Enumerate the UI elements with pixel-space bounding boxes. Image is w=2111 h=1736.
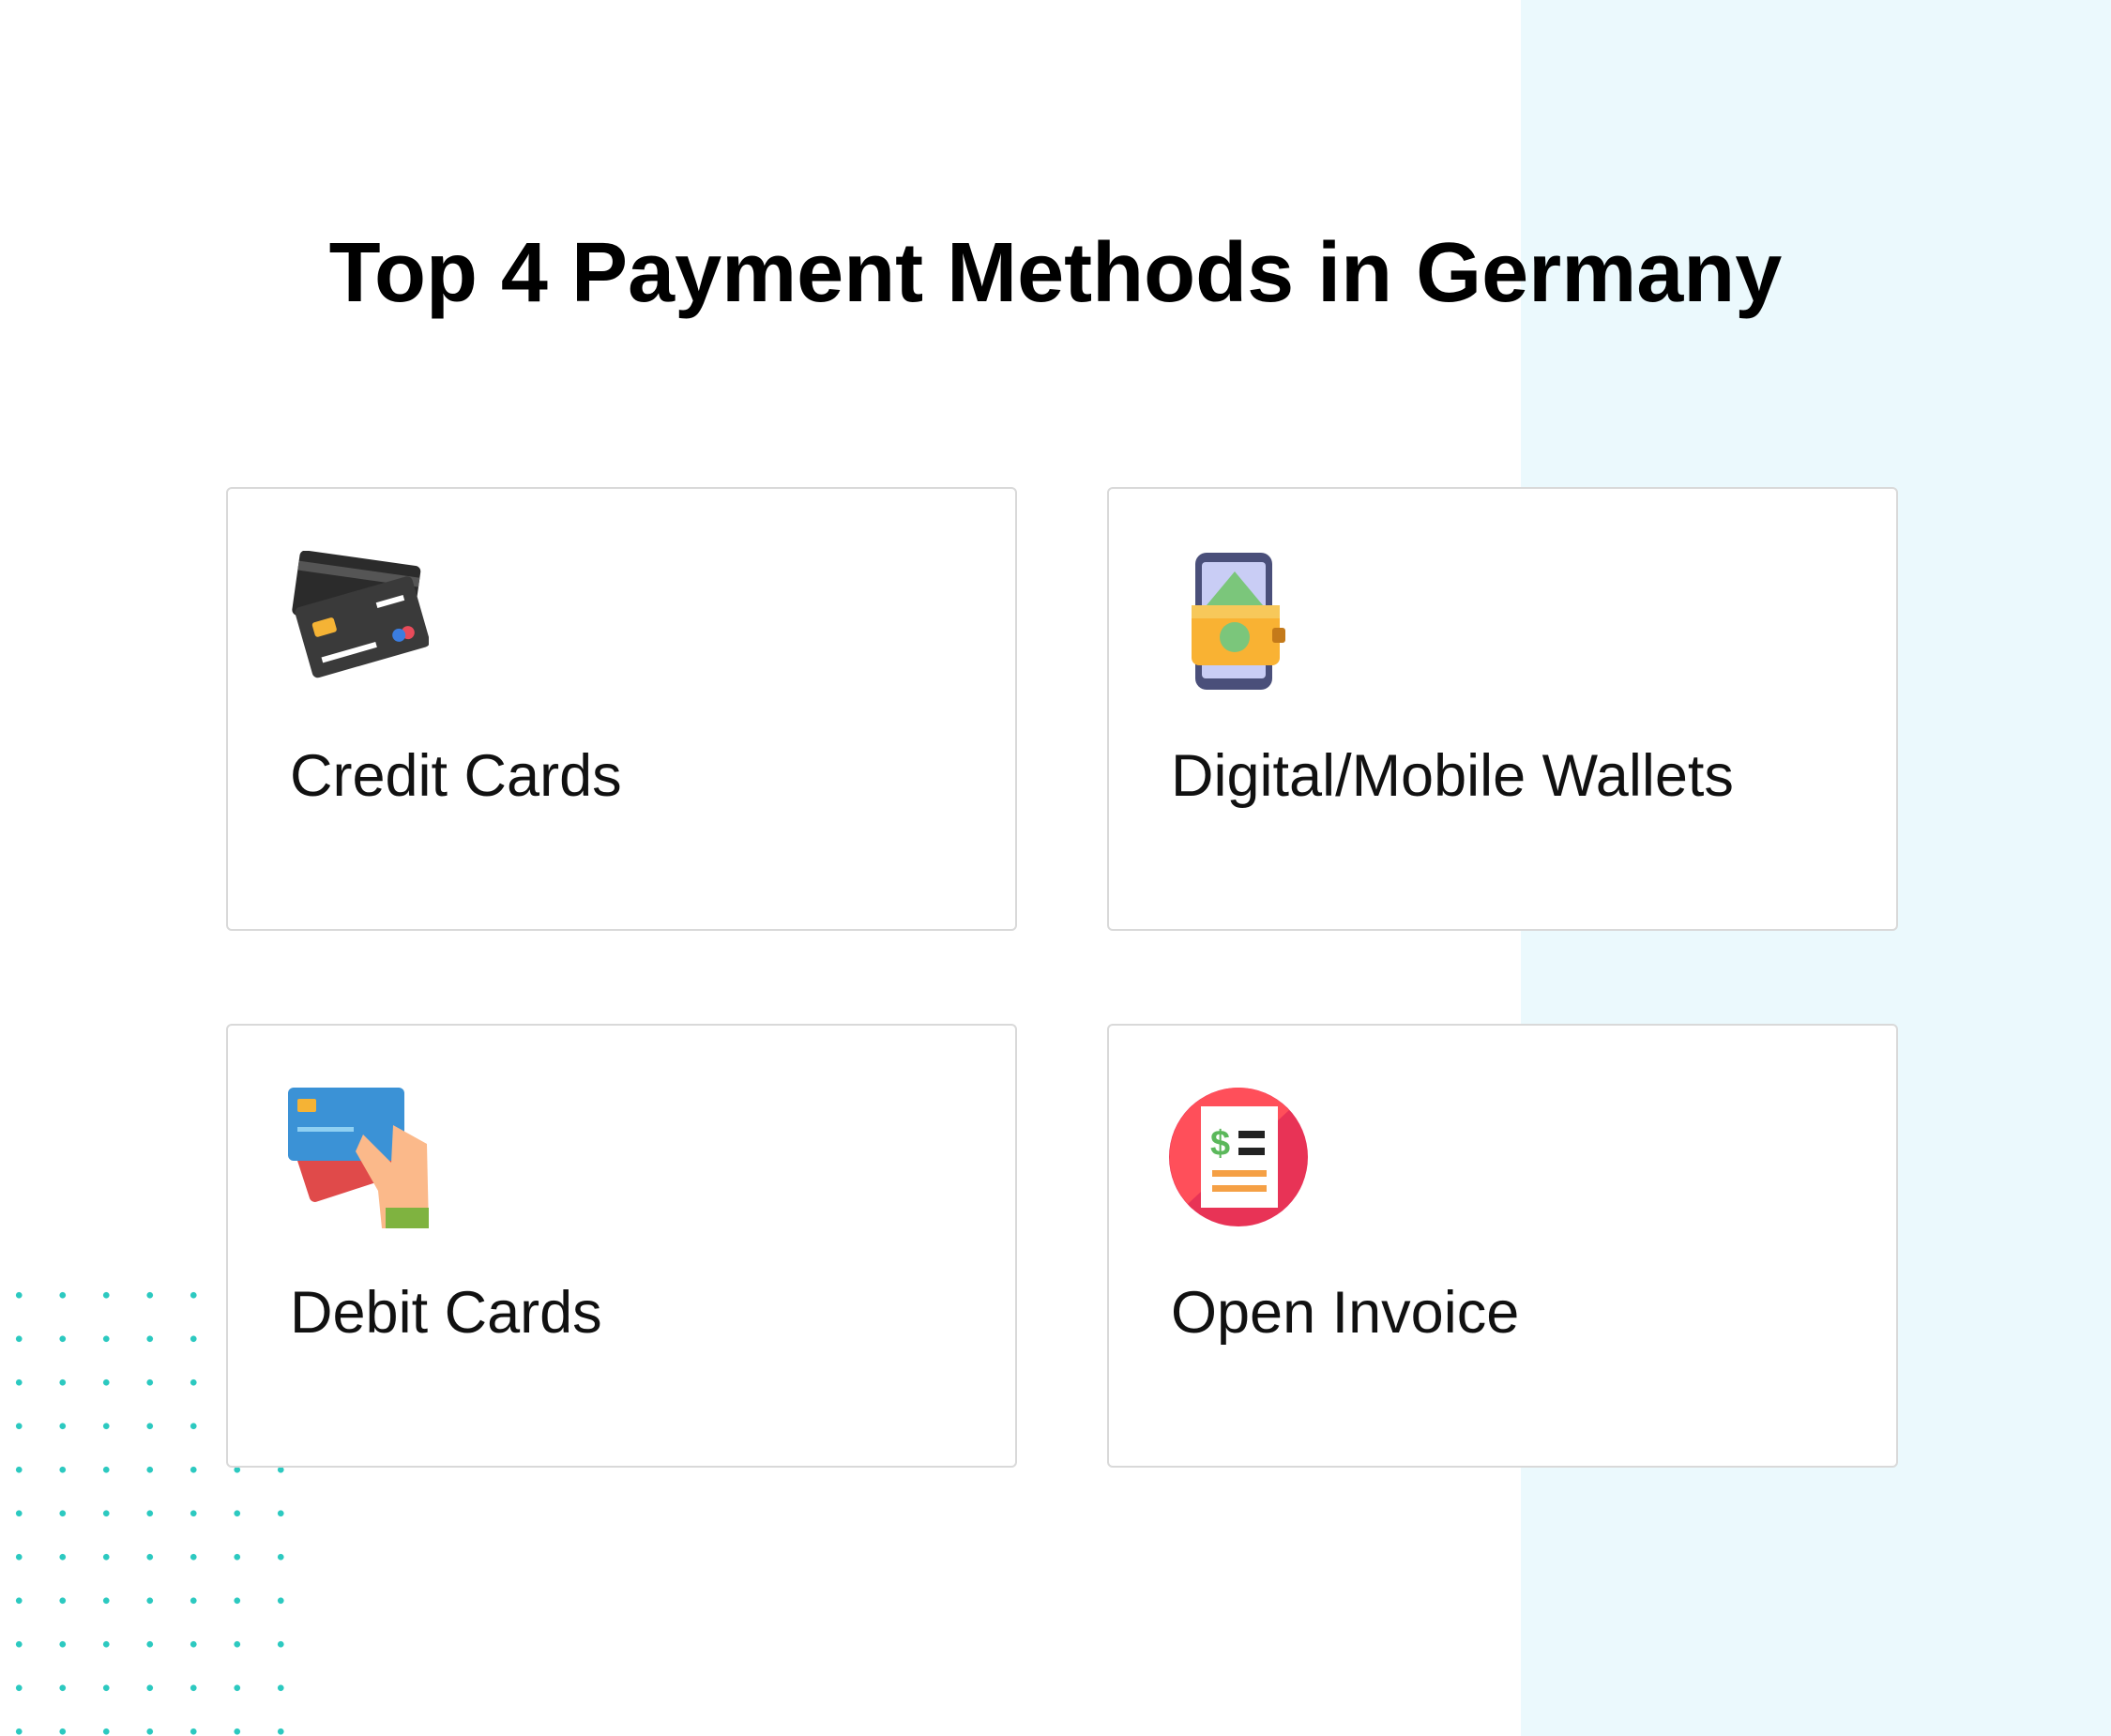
label: Open Invoice — [1171, 1280, 1519, 1346]
panel: debit cards — [226, 1024, 1017, 1468]
label: Credit Cards — [290, 743, 622, 809]
label: Debit Cards — [290, 1280, 602, 1346]
icon: invoice — [1169, 1088, 1308, 1226]
icon: credit cards — [292, 551, 429, 678]
dot pattern — [0, 1273, 302, 1736]
icon: invoice: $ — [1210, 1124, 1230, 1164]
icon: debit card in hand — [288, 1088, 429, 1228]
panel: credit cards — [226, 487, 1017, 931]
icon: mobile wallet — [1192, 553, 1285, 690]
panel: open invoice — [1107, 1024, 1898, 1468]
panel: digital wallets — [1107, 487, 1898, 931]
title: Top 4 Payment Methods in Germany — [329, 226, 1782, 320]
label: Digital/Mobile Wallets — [1171, 743, 1734, 809]
